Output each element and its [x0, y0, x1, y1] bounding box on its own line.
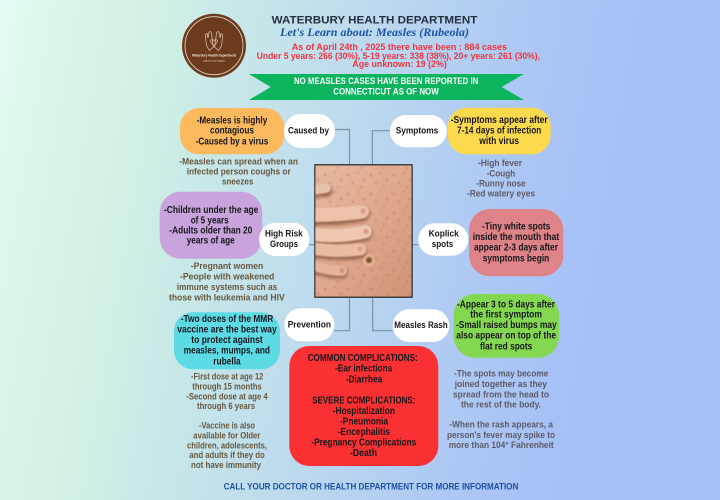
panel: symptoms: with virus	[478, 136, 519, 147]
text block: other high risk groups: immune systems such as	[177, 282, 277, 292]
text block: rash progression: -When the rash appears, a	[449, 420, 554, 430]
text block: other high risk groups	[169, 261, 286, 302]
label: prevention: Prevention	[288, 320, 331, 331]
text block: how measles spreads: -Measles can spread when an	[179, 156, 298, 166]
panel: complications: -Encephalitis	[338, 427, 390, 438]
text block: vaccine schedule	[186, 372, 268, 470]
icon: navel	[364, 254, 374, 266]
title: WATERBURY HEALTH DEPARTMENT	[272, 14, 477, 26]
banner: CONNECTICUT AS OF NOW	[333, 86, 439, 96]
panel: complications	[289, 346, 438, 466]
connector lines	[309, 130, 418, 331]
text block: rash progression: the rest of the body.	[461, 399, 541, 409]
panel: complications: -Pregnancy Complications	[311, 438, 417, 449]
text block: vaccine schedule: through 15 months	[192, 381, 262, 391]
panel: koplick spots: inside the mouth that	[473, 232, 560, 243]
panel: caused by: -Measles is highly	[197, 115, 268, 126]
text block: how measles spreads: sneezes	[222, 177, 253, 187]
panel: koplick spots	[469, 209, 563, 276]
panel: measles rash: -Small raised bumps may	[456, 320, 557, 331]
finger shadows	[312, 191, 365, 273]
panel: prevention: vaccine are the best way	[177, 325, 277, 336]
text block: symptom list	[467, 158, 535, 199]
label: caused by	[284, 114, 335, 148]
logo: Light for every neighbor	[203, 60, 225, 62]
label: high risk groups: Groups	[270, 239, 298, 250]
label: high risk groups: High Risk	[265, 228, 303, 239]
text block: other high risk groups: -People with weakened	[180, 272, 274, 282]
icon: hands and heart	[206, 32, 222, 50]
panel: symptoms	[448, 108, 551, 154]
text block: vaccine schedule: -Vaccine is also	[199, 421, 255, 431]
panel: measles rash	[454, 294, 559, 358]
panel: prevention: measles, mumps, and	[184, 346, 270, 357]
panel: symptoms: 7-14 days of infection	[457, 125, 541, 136]
panel: measles rash: -Appear 3 to 5 days after	[457, 299, 555, 310]
panel: prevention: to protect against	[191, 335, 263, 346]
text block: rash progression	[447, 369, 555, 450]
label: high risk groups	[259, 223, 309, 256]
logo	[182, 14, 246, 78]
panel: measles rash: flat red spots	[480, 341, 533, 352]
panel: caused by: -Caused by a virus	[196, 136, 269, 147]
text block: other high risk groups: those with leukemia and HIV	[169, 292, 286, 302]
panel: complications: -Ear infections	[335, 364, 393, 375]
label: symptoms	[390, 115, 447, 147]
panel: high risk groups	[160, 192, 262, 259]
text block: vaccine schedule: children, adolescents,	[187, 440, 267, 450]
panel: caused by	[180, 108, 284, 154]
text block: symptom list: -High fever	[478, 158, 522, 168]
panel: prevention: -Two doses of the MMR	[181, 314, 273, 325]
panel: high risk groups: -Adults older than 20	[169, 226, 253, 237]
panel: prevention	[174, 312, 280, 369]
text block: rash progression: joined together as they	[454, 379, 548, 389]
case statistics: As of April 24th , 2025 there have been : 884 cases	[292, 41, 507, 52]
footer call to action: CALL YOUR DOCTOR OR HEALTH DEPARTMENT FOR MORE INFORMATION	[224, 481, 519, 491]
panel: high risk groups: of 5 years	[191, 215, 229, 226]
panel: caused by: contagious	[210, 126, 254, 137]
panel: koplick spots: appear 2-3 days after	[474, 243, 558, 254]
case statistics: Age unknown: 19 (2%)	[352, 58, 447, 69]
text block: symptom list: -Cough	[487, 168, 516, 178]
text block: rash progression: -The spots may become	[454, 369, 548, 379]
label: measles rash: Measles Rash	[394, 320, 448, 331]
panel: complications: COMMON COMPLICATIONS:	[308, 353, 418, 364]
panel: high risk groups: years of age	[187, 236, 235, 247]
text block: vaccine schedule: not have immunity	[191, 460, 262, 470]
photo: measles rash on skin	[312, 164, 413, 298]
text block: vaccine schedule: and adults if they do	[189, 450, 265, 460]
label: koplick spots	[418, 223, 468, 256]
text block: rash progression: more than 104° Fahrenheit	[449, 440, 554, 450]
subtitle: Let's Learn about: Measles (Rubeola)	[279, 25, 469, 39]
panel: symptoms: -Symptoms appear after	[451, 115, 548, 126]
text block: vaccine schedule: available for Older	[193, 430, 261, 440]
panel: prevention: rubella	[213, 356, 241, 367]
label: prevention	[284, 308, 334, 341]
panel: complications: SEVERE COMPLICATIONS:	[312, 395, 415, 406]
label: caused by: Caused by	[288, 125, 330, 136]
panel: complications: -Death	[350, 448, 377, 459]
panel: high risk groups: -Children under the age	[164, 205, 259, 216]
panel: koplick spots: symptoms begin	[483, 253, 549, 264]
text block: symptom list: -Red watery eyes	[467, 189, 535, 199]
case statistics	[257, 41, 540, 69]
panel: measles rash: also appear on top of the	[456, 331, 556, 342]
panel: complications: -Hospitalization	[333, 406, 395, 417]
text block: how measles spreads	[179, 156, 298, 187]
banner: NO MEASLES CASES HAVE BEEN REPORTED IN	[294, 76, 478, 86]
label: koplick spots: Koplick	[429, 229, 459, 240]
banner	[249, 74, 524, 100]
case statistics: Under 5 years: 266 (30%), 5-19 years: 338 (38%), 20+ years: 261 (30%),	[257, 50, 540, 61]
text block: rash progression: spread from the head to	[453, 389, 549, 399]
fingers	[312, 188, 369, 273]
panel: complications: -Pneumonia	[340, 417, 388, 428]
text block: rash progression: person's fever may spike to	[447, 430, 555, 440]
logo: Waterbury Health Department	[192, 53, 237, 57]
panel: measles rash: the first symptom	[470, 310, 542, 321]
panel: koplick spots: -Tiny white spots	[482, 221, 551, 232]
text block: vaccine schedule: -Second dose at age 4	[186, 391, 268, 401]
text block: other high risk groups: -Pregnant women	[191, 261, 264, 271]
panel: complications: -Diarrhea	[346, 374, 383, 385]
text block: vaccine schedule: -First dose at age 12	[191, 372, 263, 382]
label: measles rash	[393, 309, 449, 342]
text block: how measles spreads: infected person coughs or	[187, 167, 291, 177]
text block: symptom list: -Runny nose	[476, 179, 526, 189]
label: koplick spots: spots	[432, 239, 453, 250]
label: symptoms: Symptoms	[396, 125, 438, 136]
text block: vaccine schedule: through 6 years	[197, 401, 255, 411]
